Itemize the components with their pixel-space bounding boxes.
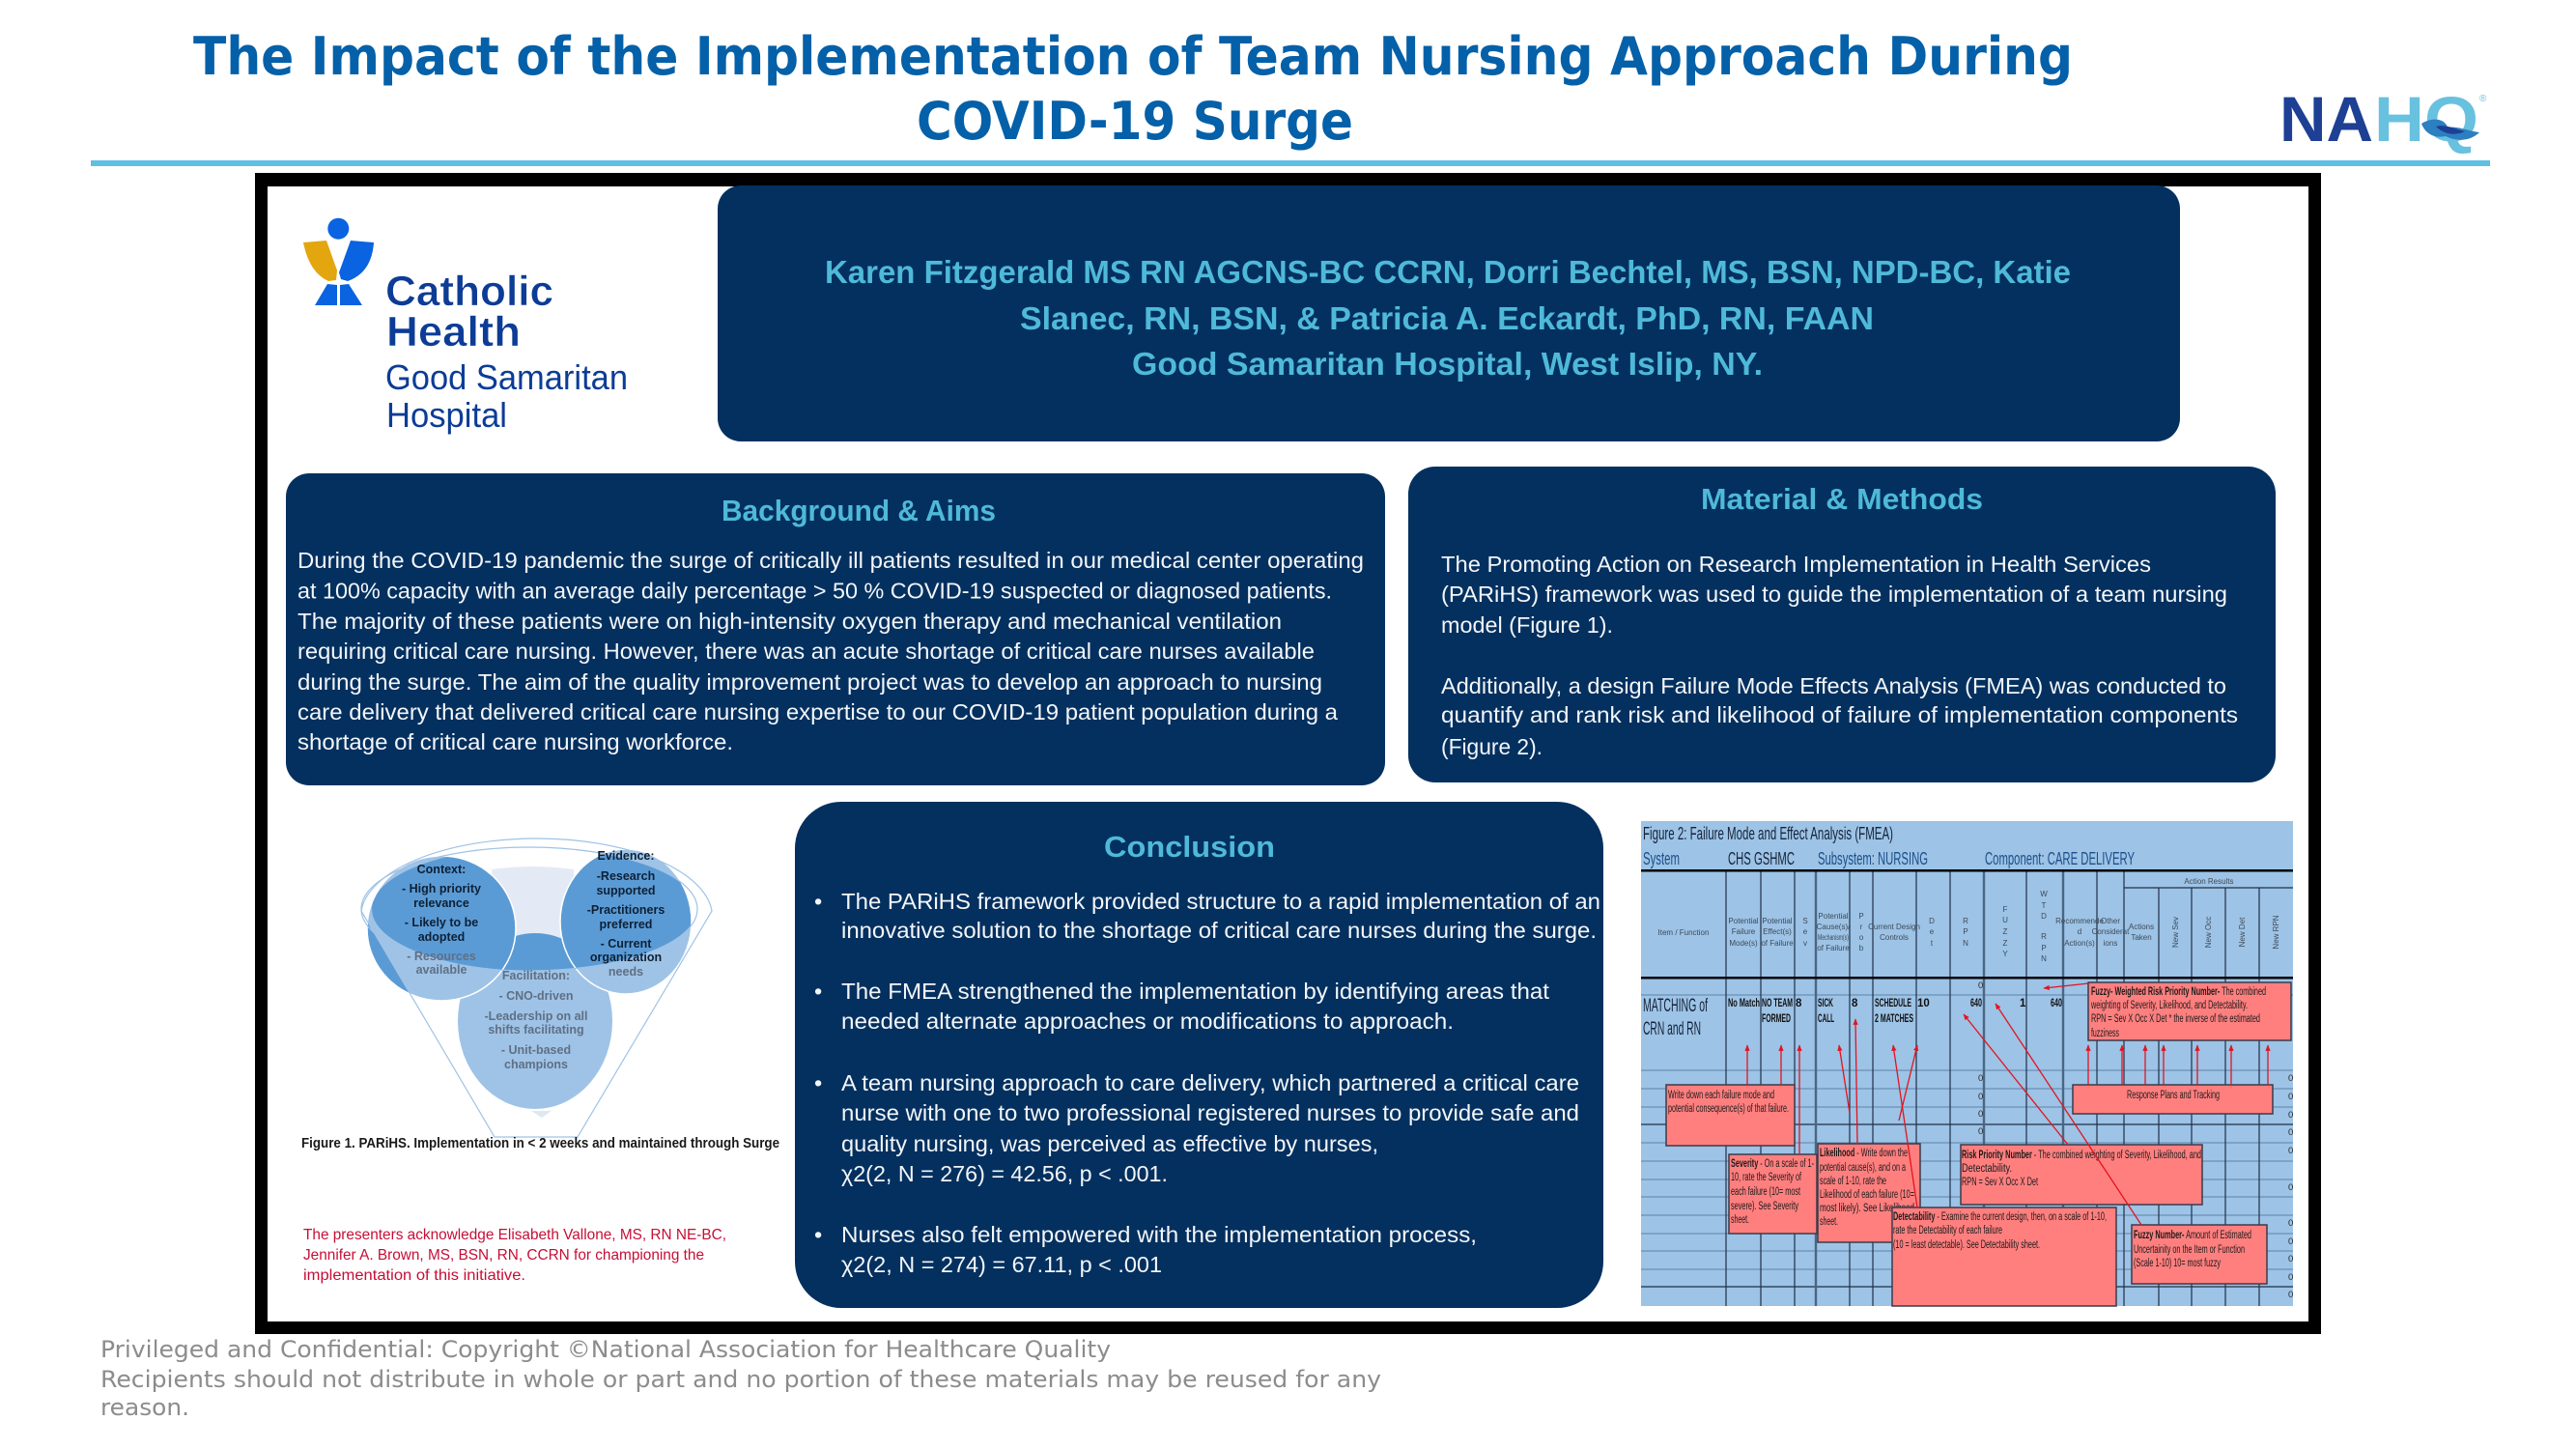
table column headers: New Occ <box>2204 917 2213 948</box>
label: evidence: - Current <box>601 937 652 951</box>
text block: background body: During the COVID-19 pandemic the surge of critically ill patients resulted in our medical center operating <box>297 548 1364 573</box>
callout: failure mode: potential consequence(s) of that failure. <box>1668 1103 1789 1115</box>
text block: acknowledgement: implementation of this initiative. <box>303 1267 525 1284</box>
table column headers: Action Results <box>2184 877 2234 886</box>
table column headers: U <box>2002 916 2008 924</box>
table column headers: r <box>1860 923 1863 931</box>
callout: fuzzy number: Fuzzy Number- Amount of Estimated <box>2134 1230 2251 1241</box>
callout: severity: each failure (10= most <box>1731 1186 1801 1198</box>
text block: conclusion bullets: needed alternate approaches or modifications to approach. <box>841 1009 1454 1034</box>
table data row: SCHEDULE <box>1875 998 1911 1009</box>
text block: background body <box>297 548 1364 754</box>
callout: risk priority number <box>1961 1145 2202 1205</box>
text block: methods body: Additionally, a design Failure Mode Effects Analysis (FMEA) was conducted to <box>1441 673 2226 698</box>
callout: detectability: Detectability - Examine the current design, then, on a scale of 1-10, <box>1893 1211 2107 1223</box>
text block: methods body: The Promoting Action on Research Implementation in Health Services <box>1441 552 2151 577</box>
callout: likelihood: sheet. <box>1820 1216 1838 1228</box>
table column headers: d <box>2078 927 2081 936</box>
table column headers: Y <box>2002 950 2008 958</box>
text block: conclusion bullets: nurse with one to two professional registered nurses to provide safe and <box>841 1100 1579 1125</box>
callout: response plans: Response Plans and Tracking <box>2127 1090 2220 1101</box>
callout: fuzzy weighted RPN: RPN = Sev X Occ X Det * the inverse of the estimated <box>2091 1013 2260 1025</box>
text block: conclusion bullets: innovative solution to the shortage of critical care nurses during the surge. <box>841 918 1597 943</box>
callout: likelihood: most likely). See Likelihood <box>1820 1203 1914 1214</box>
table column headers: b <box>1859 944 1864 952</box>
label: context: Context: <box>417 863 466 876</box>
chart: PARiHS venn funnel <box>361 838 712 1137</box>
callout: likelihood: Likelihood of each failure (10= <box>1820 1189 1914 1201</box>
header rule <box>91 160 2490 166</box>
text block: background body: during the surge. The aim of the quality improvement project was to develop an approach to nursing <box>297 669 1322 695</box>
table meta row: Subsystem: NURSING <box>1818 849 1928 868</box>
panel: material and methods <box>1408 467 2276 782</box>
table column headers: Potential <box>1818 912 1849 921</box>
table column headers: N <box>2041 954 2047 963</box>
logo: NAHQ: NA <box>2279 83 2373 155</box>
callout: fuzzy weighted RPN: fuzziness <box>2091 1028 2119 1039</box>
table data row: 640 <box>1970 998 1982 1009</box>
text block: conclusion bullets: • <box>814 1070 822 1095</box>
footer: confidentiality notice: reason. <box>100 1394 189 1421</box>
text block: methods body: (Figure 2). <box>1441 734 1543 759</box>
table column headers: Failure <box>1732 927 1756 936</box>
callout: failure mode <box>1666 1085 1795 1146</box>
table data row: 8 <box>1796 998 1802 1009</box>
label: context: adopted <box>418 930 465 944</box>
logo: Catholic Health Good Samaritan Hospital: Hospital <box>386 395 507 435</box>
callout: likelihood: scale of 1-10, rate the <box>1820 1176 1886 1187</box>
text block: conclusion bullets: Nurses also felt empowered with the implementation process, <box>841 1222 1477 1247</box>
table column headers: P <box>2041 944 2047 952</box>
table column headers: R <box>2041 932 2047 941</box>
callout: failure mode: Write down each failure mode and <box>1668 1090 1774 1101</box>
table zero values: 0 <box>1978 1092 1983 1102</box>
text block: conclusion bullets: The PARiHS framework provided structure to a rapid implementation of an <box>841 889 1600 914</box>
table data row: MATCHING of <box>1643 996 1708 1016</box>
callout: fuzzy weighted RPN: Fuzzy- Weighted Risk Priority Number- The combined <box>2091 986 2266 998</box>
arrows: callout leaders <box>1747 983 2268 1225</box>
text block: methods body: quantify and rank risk and likelihood of failure of implementation components <box>1441 702 2238 727</box>
table zero values: 0 <box>2288 1236 2293 1247</box>
table zero values: 0 <box>2288 1127 2293 1138</box>
table column headers: Z <box>2003 939 2008 948</box>
callout: fuzzy weighted RPN <box>2088 982 2291 1040</box>
table meta row: CHS GSHMC <box>1728 849 1795 868</box>
table column headers: of Failure <box>1761 939 1794 948</box>
panel: authors: Karen Fitzgerald MS RN AGCNS-BC CCRN, Dorri Bechtel, MS, BSN, NPD-BC, Katie <box>825 254 2071 290</box>
logo: NAHQ <box>2279 83 2487 155</box>
poster frame <box>261 180 2314 1327</box>
panel: background and aims <box>286 473 1385 785</box>
table column headers: New Sev <box>2171 917 2180 948</box>
table column headers: Cause(s)/ <box>1817 923 1851 931</box>
table zero values: 0 <box>2288 1073 2293 1084</box>
table column headers: T <box>2042 901 2047 910</box>
text block: methods body <box>1441 552 2238 759</box>
text block: conclusion bullets: • <box>814 979 822 1004</box>
table column headers: e <box>1930 927 1935 936</box>
label: evidence: Evidence: <box>597 849 655 863</box>
text block: background body: requiring critical care nursing. However, there was an acute shortage of critical care nurses available <box>297 639 1315 664</box>
label: context: - High priority <box>402 882 481 895</box>
text block: conclusion bullets: χ2(2, N = 274) = 67.11, p < .001 <box>841 1252 1162 1277</box>
table column headers: S <box>1802 917 1808 925</box>
title <box>193 26 2073 152</box>
table column headers: D <box>2041 912 2047 921</box>
table data row: 10 <box>1917 998 1930 1009</box>
text block: conclusion bullets: The FMEA strengthened the implementation by identifying areas that <box>841 979 1549 1004</box>
table data row: CALL <box>1818 1013 1834 1025</box>
table column headers: Potential <box>1762 917 1793 925</box>
callout: response plans <box>2073 1085 2273 1114</box>
logo: Catholic Health Good Samaritan Hospital: Good Samaritan <box>385 357 628 397</box>
label: context: relevance <box>413 896 469 910</box>
table data row: CRN and RN <box>1643 1019 1701 1039</box>
footer: confidentiality notice: Recipients should not distribute in whole or part and no portion of these materials may be reused for any <box>100 1366 1381 1393</box>
table column headers: Taken <box>2131 933 2152 942</box>
table column headers: o <box>1859 933 1864 942</box>
table zero values: 0 <box>1978 1109 1983 1120</box>
heading: conclusion: Conclusion <box>1104 830 1275 864</box>
label: facilitation: - Unit-based <box>501 1043 571 1057</box>
callout: likelihood <box>1818 1144 1920 1242</box>
table column headers: Current Design <box>1868 923 1920 931</box>
icon: chalice figure <box>303 218 374 305</box>
table column headers: Action(s) <box>2064 939 2095 948</box>
label: context <box>402 863 481 977</box>
label: facilitation: - CNO-driven <box>498 989 574 1003</box>
table data row: FORMED <box>1762 1013 1791 1025</box>
table zero values: 0 <box>1978 1073 1983 1084</box>
table zero values: 0 <box>2288 1182 2293 1193</box>
table column headers: Potential <box>1728 917 1759 925</box>
label: evidence: -Research <box>597 869 655 883</box>
table column headers: Considerat <box>2092 927 2130 936</box>
callout: severity: 10, rate the Severity of <box>1731 1172 1802 1183</box>
label: context: available <box>416 963 467 977</box>
table zero values: 0 <box>2288 1092 2293 1102</box>
label: facilitation: champions <box>504 1058 568 1071</box>
table zero values: 0 <box>1978 980 1983 991</box>
text block: acknowledgement <box>303 1227 726 1284</box>
table data row: No Match <box>1728 998 1760 1009</box>
logo: Catholic Health Good Samaritan Hospital: Health <box>386 308 521 355</box>
table column headers: Mechanism(s) <box>1818 933 1849 942</box>
table column headers: Effect(s) <box>1763 927 1792 936</box>
label: evidence: preferred <box>600 918 652 931</box>
heading: material and methods: Material & Methods <box>1701 482 1983 516</box>
table column headers: D <box>1929 917 1935 925</box>
callout: detectability <box>1892 1208 2116 1306</box>
heading: background and aims: Background & Aims <box>722 494 996 527</box>
callout: likelihood: potential cause(s), and on a <box>1820 1162 1906 1174</box>
text block: conclusion bullets: • <box>814 1222 822 1247</box>
callout: detectability: rate the Detectability of each failure <box>1893 1225 2002 1236</box>
panel: authors <box>718 185 2180 441</box>
text block: background body: shortage of critical care nursing workforce. <box>297 729 733 754</box>
table column headers <box>1658 877 2280 963</box>
table data row: 640 <box>2051 998 2062 1009</box>
text block: conclusion bullets: χ2(2, N = 276) = 42.56, p < .001. <box>841 1161 1168 1186</box>
table column headers: New Det <box>2238 917 2247 947</box>
table zero values: 0 <box>2288 1218 2293 1229</box>
label: context: - Likely to be <box>405 916 478 929</box>
callout: risk priority number: Risk Priority Number - The combined weighting of Severity, Likelihood, and <box>1962 1150 2201 1161</box>
table column headers: ions <box>2104 939 2117 948</box>
table column headers: W <box>2040 890 2048 898</box>
table meta row <box>1643 849 2135 868</box>
table column headers: New RPN <box>2272 915 2280 950</box>
table zero values: 0 <box>2288 1290 2293 1300</box>
table column headers: N <box>1963 939 1968 948</box>
callout: severity <box>1729 1154 1817 1234</box>
text block: background body: at 100% capacity with an average daily percentage > 50 % COVID-19 suspected or diagnosed patients. <box>297 578 1332 603</box>
logo: Catholic Health Good Samaritan Hospital: Catholic <box>385 268 553 315</box>
panel: conclusion <box>795 802 1603 1308</box>
table zero values: 0 <box>2288 1254 2293 1264</box>
label: facilitation <box>485 969 587 1071</box>
table data row: 8 <box>1852 998 1858 1009</box>
text block: conclusion bullets: quality nursing, was perceived as effective by nurses, <box>841 1131 1378 1156</box>
table zero values: 0 <box>2288 1110 2293 1121</box>
table column headers: Other <box>2101 917 2120 925</box>
text block: acknowledgement: The presenters acknowledge Elisabeth Vallone, MS, RN NE-BC, <box>303 1227 726 1243</box>
text block: background body: care delivery that delivered critical care nursing expertise to our COVID-19 patient population during a <box>297 699 1339 724</box>
callout: risk priority number: RPN = Sev X Occ X Det <box>1962 1177 2039 1188</box>
logo: NAHQ: HQ <box>2374 83 2478 155</box>
table column headers: e <box>1803 927 1808 936</box>
table data row: 2 MATCHES <box>1875 1013 1913 1025</box>
table zero values: 0 <box>2288 1146 2293 1156</box>
table column headers: Item / Function <box>1658 928 1709 937</box>
label: evidence: organization <box>590 951 662 964</box>
table column headers: t <box>1931 939 1934 948</box>
callout: detectability: (10 = least detectable). See Detectability sheet. <box>1893 1239 2040 1251</box>
text block: methods body: model (Figure 1). <box>1441 612 1613 638</box>
table column headers: P <box>1963 927 1968 936</box>
label: evidence <box>587 849 665 979</box>
table column headers: R <box>1963 917 1968 925</box>
table data row: SICK <box>1818 998 1833 1009</box>
label: facilitation: Facilitation: <box>502 969 570 982</box>
table data row: 1 <box>2020 998 2026 1009</box>
text block: conclusion bullets: A team nursing approach to care delivery, which partnered a critical care <box>841 1070 1579 1095</box>
label: evidence: needs <box>609 965 643 979</box>
text block: methods body: (PARiHS) framework was used to guide the implementation of a team nursing <box>1441 582 2227 607</box>
label: evidence: supported <box>596 884 656 897</box>
table column headers: Actions <box>2129 923 2154 931</box>
frame top bar <box>255 173 2321 186</box>
table meta row: Component: CARE DELIVERY <box>1985 849 2135 868</box>
chart: FMEA table figure 2 <box>1641 821 2293 1306</box>
table column headers: v <box>1803 939 1807 948</box>
label: evidence: -Practitioners <box>587 903 665 917</box>
label: context: - Resources <box>407 950 476 963</box>
title: COVID-19 Surge <box>917 91 1353 152</box>
text block: conclusion bullets <box>814 889 1600 1277</box>
table column headers: Z <box>2003 927 2008 936</box>
table column headers: Mode(s) <box>1729 939 1758 948</box>
callout: fuzzy weighted RPN: weighting of Severity, Likelihood, and Detectability. <box>2090 1000 2248 1011</box>
callout: fuzzy number: (Scale 1-10) 10= most fuzzy <box>2134 1258 2221 1269</box>
footer: confidentiality notice <box>100 1336 1381 1421</box>
callout: risk priority number: Detectability. <box>1962 1163 2012 1175</box>
table zero values <box>1978 980 2293 1300</box>
text block: acknowledgement: Jennifer A. Brown, MS, BSN, RN, CCRN for championing the <box>303 1247 704 1264</box>
text block: conclusion bullets: • <box>814 889 822 914</box>
label: facilitation: -Leadership on all <box>485 1009 587 1023</box>
callout: likelihood: Likelihood - Write down the <box>1820 1148 1908 1159</box>
panel: authors: Good Samaritan Hospital, West Islip, NY. <box>1132 346 1763 382</box>
table column headers: Recommende <box>2055 917 2104 925</box>
table column headers: Controls <box>1880 933 1909 942</box>
heading: figure 2 title: Figure 2: Failure Mode and Effect Analysis (FMEA) <box>1643 824 1893 843</box>
logo: NAHQ: ® <box>2479 94 2487 104</box>
table column headers: F <box>2003 905 2008 914</box>
table zero values: 0 <box>2288 1272 2293 1283</box>
text block: background body: The majority of these patients were on high-intensity oxygen therapy and mechanical ventilation <box>297 609 1282 634</box>
table column headers: P <box>1858 912 1864 921</box>
callout: severity: Severity - On a scale of 1- <box>1731 1158 1814 1170</box>
callout: severity: severe). See Severity <box>1731 1201 1798 1212</box>
callout: fuzzy number: Uncertainity on the Item or Function <box>2134 1244 2245 1256</box>
label: facilitation: shifts facilitating <box>488 1023 584 1037</box>
footer: confidentiality notice: Privileged and Confidential: Copyright ©National Association for Healthcare Quality <box>100 1336 1111 1363</box>
panel: authors: Slanec, RN, BSN, & Patricia A. Eckardt, PhD, RN, FAAN <box>1020 300 1874 336</box>
callout: severity: sheet. <box>1731 1214 1749 1226</box>
caption: figure 1: Figure 1. PARiHS. Implementation in < 2 weeks and maintained through Surge <box>301 1135 779 1151</box>
table column headers: of Failure <box>1817 944 1850 952</box>
table data row <box>1643 996 2062 1039</box>
table zero values: 0 <box>1978 1126 1983 1137</box>
table meta row: System <box>1643 849 1680 868</box>
logo: Catholic Health Good Samaritan Hospital <box>303 218 628 435</box>
callout: fuzzy number <box>2132 1225 2267 1284</box>
title: The Impact of the Implementation of Team Nursing Approach During <box>193 26 2073 87</box>
table data row: NO TEAM <box>1762 998 1793 1009</box>
